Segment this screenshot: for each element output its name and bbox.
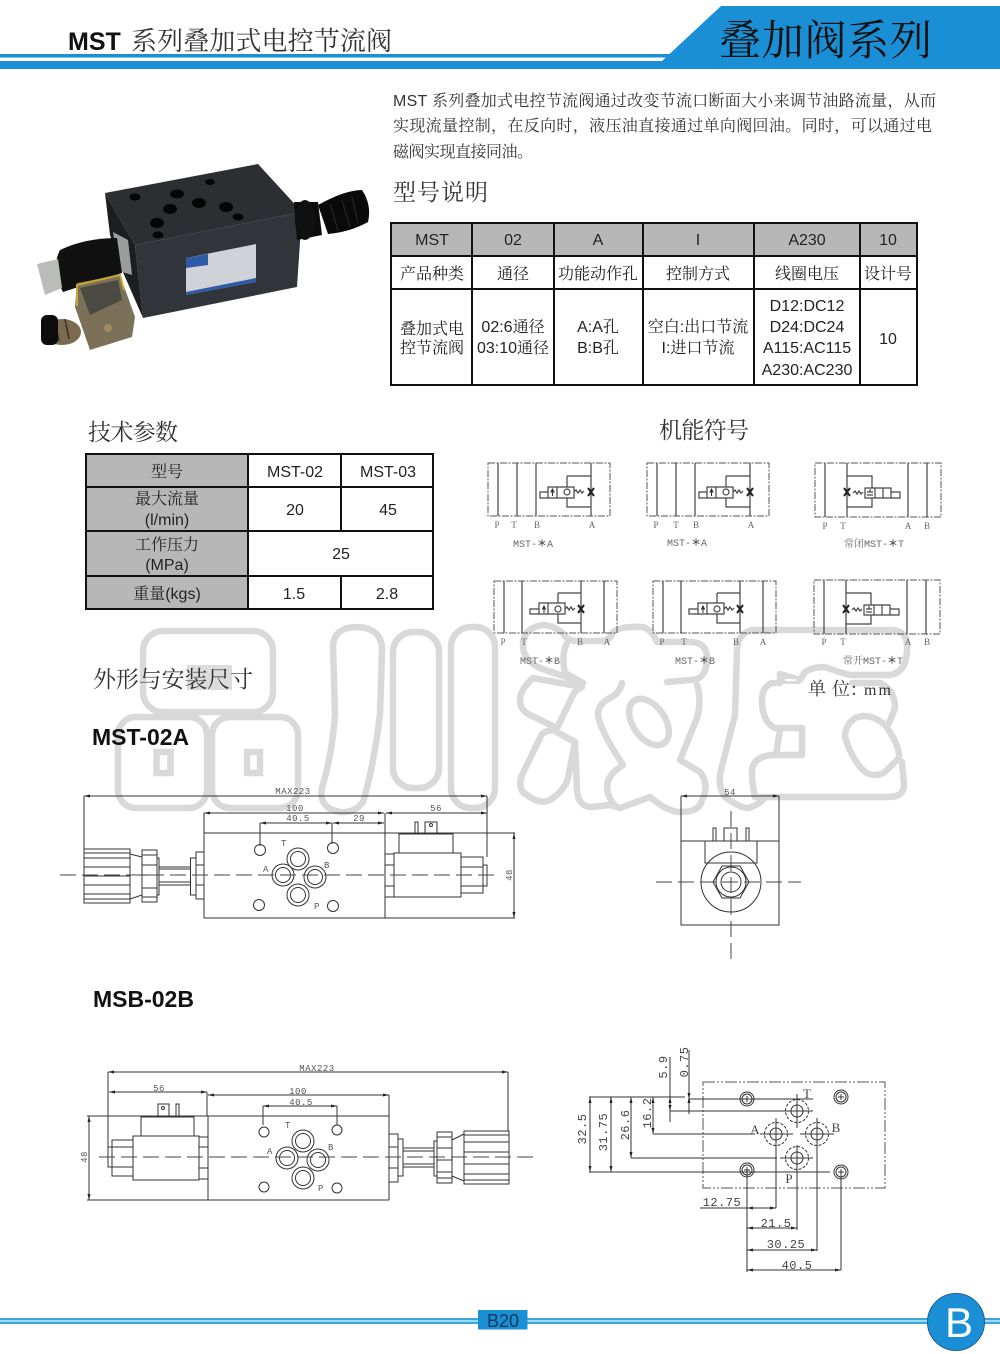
header title: MST [68,28,121,56]
table: model code: D24:DC24 [770,319,844,336]
drawing: mounting face dimensions: 21.5 [761,1217,791,1231]
drawing: MSB-02B side view: 48 [80,1151,90,1163]
drawing: MSB-02B side view: 100 [289,1087,307,1097]
table: technical parameters: 20 [286,502,304,519]
drawing: MST-02A side view: 48 [505,869,515,881]
table: technical parameters: MST-02 [267,464,323,481]
page number tag: B20 [487,1311,519,1331]
function symbol: MST-*B second: B [733,637,739,647]
drawing: MSB-02B side view: 40.5 [289,1098,313,1108]
table: model code: I [696,232,700,249]
function symbol: MST-*B: MST-＊B [520,652,560,668]
product photo: valve [37,164,369,350]
table: model code: A [593,232,604,249]
function symbol: MST-*A second: MST-＊A [667,534,707,550]
drawing: MSB-02B side view [80,1064,535,1200]
drawing: MSB-02B side view: A [267,1147,273,1157]
unit note: : [851,675,857,701]
heading: model description: 型号说明 [393,174,488,207]
drawing: MST-02A side view: 29 [353,814,365,824]
drawing: mounting face dimensions: 31.75 [597,1113,611,1151]
drawing: mounting face dimensions: 16.2 [641,1098,655,1128]
drawing: mounting face dimensions: 5.9 [657,1055,671,1079]
drawing: MST-02A end view [656,788,801,960]
heading: MST-02A: MST-02A [92,724,189,750]
table: model code: 10 [879,232,897,249]
function symbol: MST-*A second: A [748,520,755,530]
function symbol: normally open MST-*T: T [840,637,846,647]
drawing: mounting face dimensions: 0.75 [678,1047,692,1077]
table: model code: 02 [504,232,522,249]
function symbol: MST-*B second [653,581,776,668]
function symbol: MST-*A: B [534,520,540,530]
function symbol: normally closed MST-*T [815,463,941,551]
page number tag [478,1310,528,1331]
table: technical parameters: (l/min) [145,512,189,529]
table: model code: B:B孔 [577,339,619,357]
drawing: mounting face dimensions: 26.6 [619,1110,633,1140]
drawing: mounting face dimensions [576,1047,885,1273]
function symbol: normally open MST-*T: A [905,637,912,647]
function symbol: MST-*B second: T [681,637,687,647]
description paragraph: MST 系列叠加式电控节流阀通过改变节流口断面大小来调节油路流量，从而 [393,92,936,110]
table: model code: 通径 [497,265,529,283]
drawing: MST-02A side view [60,787,515,918]
function symbol: MST-*A second: B [693,520,699,530]
table: technical parameters: 45 [379,502,397,519]
drawing: MSB-02B side view: 56 [153,1084,165,1094]
heading: function symbols: 机能符号 [659,412,749,445]
table: model code: D12:DC12 [770,298,844,315]
function symbol: MST-*B: B [577,637,583,647]
drawing: mounting face dimensions: P [785,1171,793,1186]
function symbol: MST-*A [488,463,610,551]
table: technical parameters: 工作压力 [135,536,199,554]
function symbol: normally closed MST-*T: A [905,521,912,531]
drawing: MST-02A side view: MAX223 [275,787,311,797]
watermark: 品川液压 [118,625,907,812]
heading: MSB-02B: MSB-02B [93,986,194,1012]
function symbol: MST-*B second: A [760,637,767,647]
function symbol: normally open MST-*T: P [821,637,827,647]
drawing: MSB-02B side view: T [285,1121,291,1131]
unit note: mm [864,682,893,699]
function symbol: MST-*A: MST-＊A [513,535,553,551]
table: model code: 控节流阀 [400,339,464,357]
table: technical parameters: (MPa) [145,557,189,574]
function symbol: MST-*A: T [511,520,517,530]
drawing: MST-02A side view: 40.5 [286,814,310,824]
drawing: mounting face dimensions: 30.25 [767,1238,805,1252]
drawing: MST-02A side view: B [324,861,330,871]
description paragraph: 实现流量控制，在反向时，液压油直接通过单向阀回油。同时，可以通过电 [393,117,932,135]
drawing: MST-02A side view: 100 [286,804,304,814]
table: model code: 叠加式电 [400,320,464,338]
drawing: MSB-02B side view: P [318,1184,324,1194]
table: model code: I:进口节流 [662,339,734,357]
header band [0,6,1000,69]
table: technical parameters: 2.8 [376,586,398,603]
table: technical parameters [86,454,433,609]
drawing: mounting face dimensions: A [750,1122,760,1137]
table: model code: 10 [879,331,897,348]
function symbol: MST-*B second: MST-＊B [675,652,715,668]
table: model code: MST [415,232,449,249]
table: model code: 空白:出口节流 [648,318,748,336]
drawing: MST-02A side view: T [281,839,287,849]
drawing: mounting face dimensions: T [803,1086,811,1101]
table: technical parameters: 重量(kgs) [133,585,201,603]
function symbol: MST-*B [494,581,617,668]
table: technical parameters: MST-03 [360,464,416,481]
unit note: 位 [832,675,850,701]
function symbol: MST-*B: P [500,637,506,647]
table: model code: 线圈电压 [775,265,839,283]
footer rule [0,1318,1000,1324]
drawing: mounting face dimensions: 12.75 [703,1196,741,1210]
function symbol: normally closed MST-*T: 常闭MST-＊T [844,535,904,551]
table: model code: A230 [788,232,826,249]
table: model code: A230:AC230 [762,362,852,379]
function symbol: MST-*B second: P [659,637,665,647]
drawing: MSB-02B side view: B [328,1143,334,1153]
drawing: MST-02A end view: 54 [724,788,736,798]
table: model code: A:A孔 [577,318,619,336]
drawing: MST-02A side view: 56 [430,804,442,814]
table: model code: A115:AC115 [763,340,851,357]
description paragraph: 磁阀实现直接同油。 [393,143,533,161]
function symbol: normally open MST-*T [814,580,940,668]
function symbol: normally closed MST-*T: T [840,521,846,531]
table: model code [391,223,917,385]
description paragraph [393,92,936,161]
table: technical parameters: 型号 [151,463,183,481]
header series label: 叠加阀系列 [719,8,932,68]
header title: 系列叠加式电控节流阀 [131,21,392,58]
function symbol: MST-*B: T [521,637,527,647]
heading: technical parameters: 技术参数 [88,414,178,447]
function symbol: MST-*A: A [589,520,596,530]
table: model code: 设计号 [864,265,912,283]
function symbol: normally open MST-*T: B [924,637,930,647]
function symbol: normally open MST-*T: 常开MST-＊T [843,652,903,668]
table: model code: 产品种类 [400,265,464,283]
table: technical parameters: 最大流量 [135,490,199,508]
function symbol: normally closed MST-*T: P [822,521,828,531]
function symbol: MST-*A: P [494,520,500,530]
unit note: 单 [808,675,826,701]
function symbol: MST-*A second [647,463,769,550]
table: model code: 功能动作孔 [558,265,638,283]
drawing: mounting face dimensions: 40.5 [782,1259,812,1273]
drawing: MST-02A side view: P [314,902,320,912]
table: technical parameters: 1.5 [283,586,305,603]
function symbol: MST-*A second: T [673,520,679,530]
function symbol: normally closed MST-*T: B [924,521,930,531]
table: technical parameters: 25 [332,546,350,563]
heading: outline and mounting dimensions: 外形与安装尺寸 [93,661,253,694]
function symbol: MST-*A second: P [653,520,659,530]
table: model code: 02:6通径 [481,318,545,336]
drawing: MSB-02B side view: MAX223 [299,1064,335,1074]
drawing: mounting face dimensions: 32.5 [576,1114,590,1144]
drawing: MST-02A side view: A [263,865,269,875]
drawing: mounting face dimensions: B [832,1120,841,1135]
function symbol: MST-*B: A [604,637,611,647]
section badge B [928,1294,984,1350]
section badge B: B [945,1299,973,1346]
table: model code: 控制方式 [666,265,730,283]
table: model code: 03:10通径 [477,339,549,357]
